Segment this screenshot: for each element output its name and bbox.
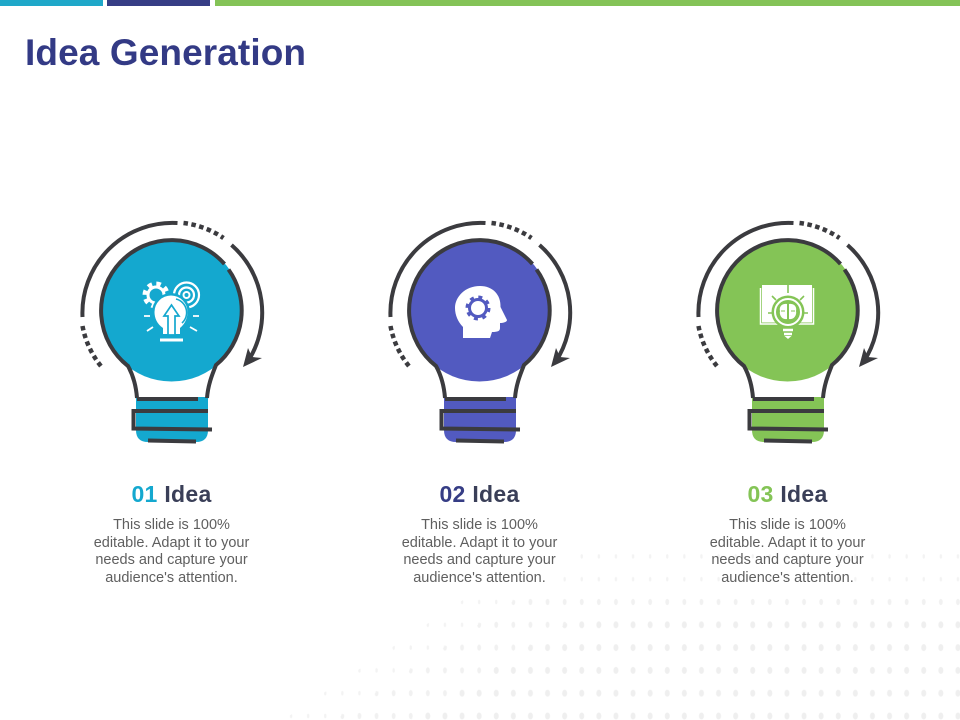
text: column 3 — [710, 517, 866, 586]
title: Idea Generation — [25, 32, 306, 73]
icon: book with brain bulb — [760, 285, 814, 339]
text: column 3: editable. Adapt it to your — [710, 535, 865, 551]
text: column 2: audience's attention. — [413, 570, 546, 586]
text: column 2: This slide is 100% — [421, 517, 538, 533]
heading: 03 Idea: 03 Idea — [747, 481, 828, 507]
bulb 3 circular arrow — [698, 223, 878, 368]
bulb 1 — [82, 223, 262, 442]
bulb 3 base fill — [752, 397, 824, 442]
bulb 3 — [698, 223, 878, 442]
bulb 1 globe fill — [100, 240, 242, 382]
text: column 1: This slide is 100% — [113, 517, 230, 533]
bulb 2 outline — [409, 240, 550, 442]
text: column 2: needs and capture your — [403, 552, 556, 568]
text: column 3: audience's attention. — [721, 570, 854, 586]
icon: idea gear target bulb — [144, 282, 199, 340]
icon: head with gear — [455, 286, 507, 338]
text: column 1: editable. Adapt it to your — [94, 535, 249, 551]
bulb 2 base fill — [444, 397, 516, 442]
heading: 01 Idea: 01 Idea — [131, 481, 212, 507]
bulb 2 globe fill — [408, 240, 550, 382]
text: column 1 — [94, 517, 250, 586]
top accent bars — [0, 0, 960, 6]
text: column 3: This slide is 100% — [729, 517, 846, 533]
text: column 3: needs and capture your — [711, 552, 864, 568]
bulb 3 outline — [717, 240, 858, 442]
bulb 3 globe fill — [716, 240, 858, 382]
bulb 1 base fill — [136, 397, 208, 442]
bulb 2 — [390, 223, 570, 442]
text: column 1: audience's attention. — [105, 570, 238, 586]
bulb 1 outline — [101, 240, 242, 442]
bulb 1 circular arrow — [82, 223, 262, 368]
text: column 1: needs and capture your — [95, 552, 248, 568]
background dot pattern — [283, 545, 960, 720]
text: column 2 — [402, 517, 558, 586]
bulb 2 circular arrow — [390, 223, 570, 368]
heading: 02 Idea: 02 Idea — [439, 481, 520, 507]
text: column 2: editable. Adapt it to your — [402, 535, 557, 551]
